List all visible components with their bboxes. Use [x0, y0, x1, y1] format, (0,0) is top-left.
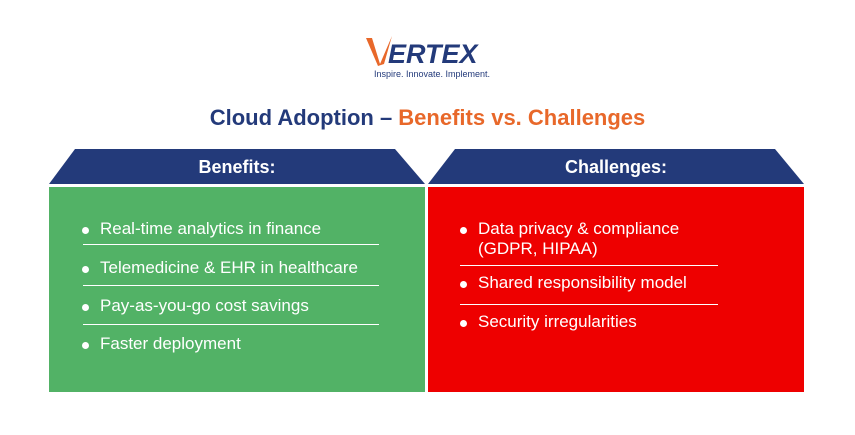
- panel: challenges: [428, 149, 804, 392]
- header: challenges: [428, 149, 804, 184]
- logo wordmark: Inspire. Innovate. Implement.: [374, 69, 490, 79]
- challenges body: [428, 187, 804, 392]
- logo wordmark: ERTEX: [388, 39, 480, 69]
- challenges body: Shared responsibility model: [478, 273, 687, 292]
- benefits body: Faster deployment: [100, 334, 241, 353]
- title: Cloud Adoption – Benefits vs. Challenges: [210, 105, 645, 130]
- header: benefits: Benefits:: [198, 157, 276, 177]
- logo wordmark: [366, 36, 490, 79]
- benefits body: Pay-as-you-go cost savings: [100, 296, 309, 315]
- panel: benefits: [49, 149, 425, 392]
- benefits body: [49, 187, 425, 392]
- challenges body: (GDPR, HIPAA): [478, 239, 598, 258]
- logo: [366, 36, 490, 79]
- challenges body: Security irregularities: [478, 312, 637, 331]
- header: challenges: Challenges:: [565, 157, 667, 177]
- benefits body: Telemedicine & EHR in healthcare: [100, 258, 358, 277]
- challenges body: Data privacy & compliance: [478, 219, 679, 238]
- header: benefits: [49, 149, 425, 184]
- benefits body: Real-time analytics in finance: [100, 219, 321, 238]
